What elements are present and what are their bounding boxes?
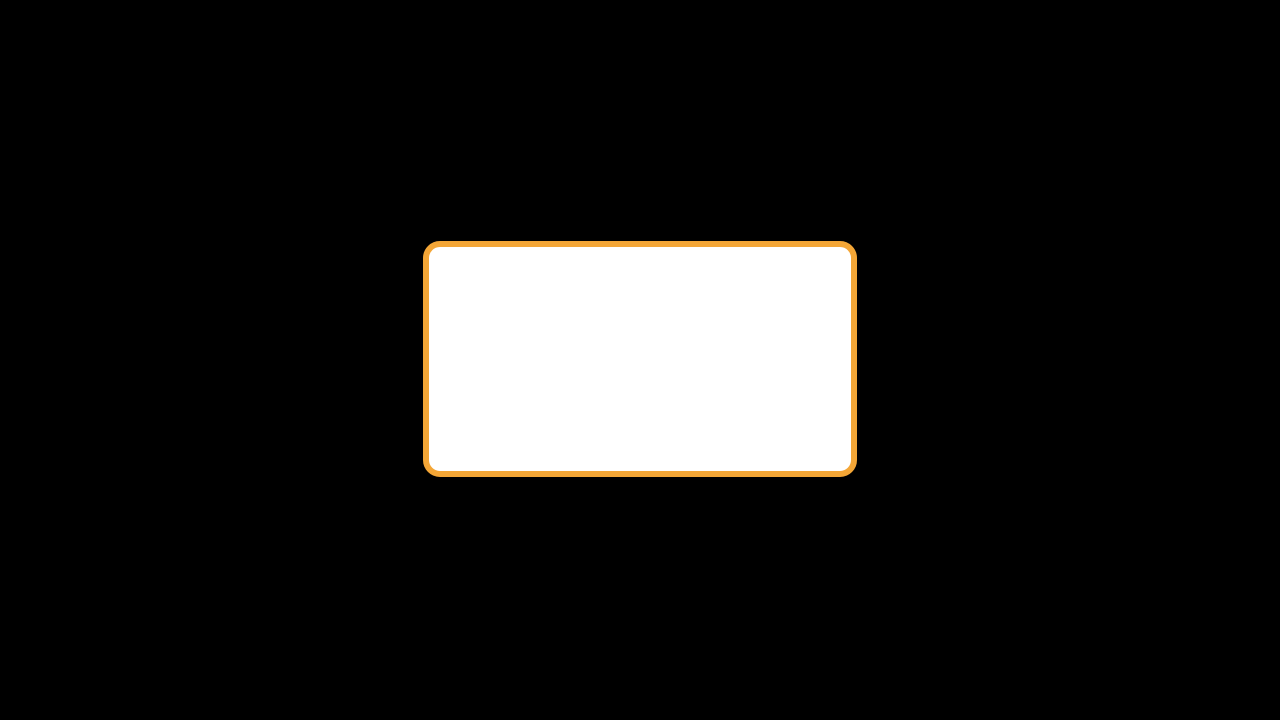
panel: empty white rounded box [423, 241, 857, 477]
